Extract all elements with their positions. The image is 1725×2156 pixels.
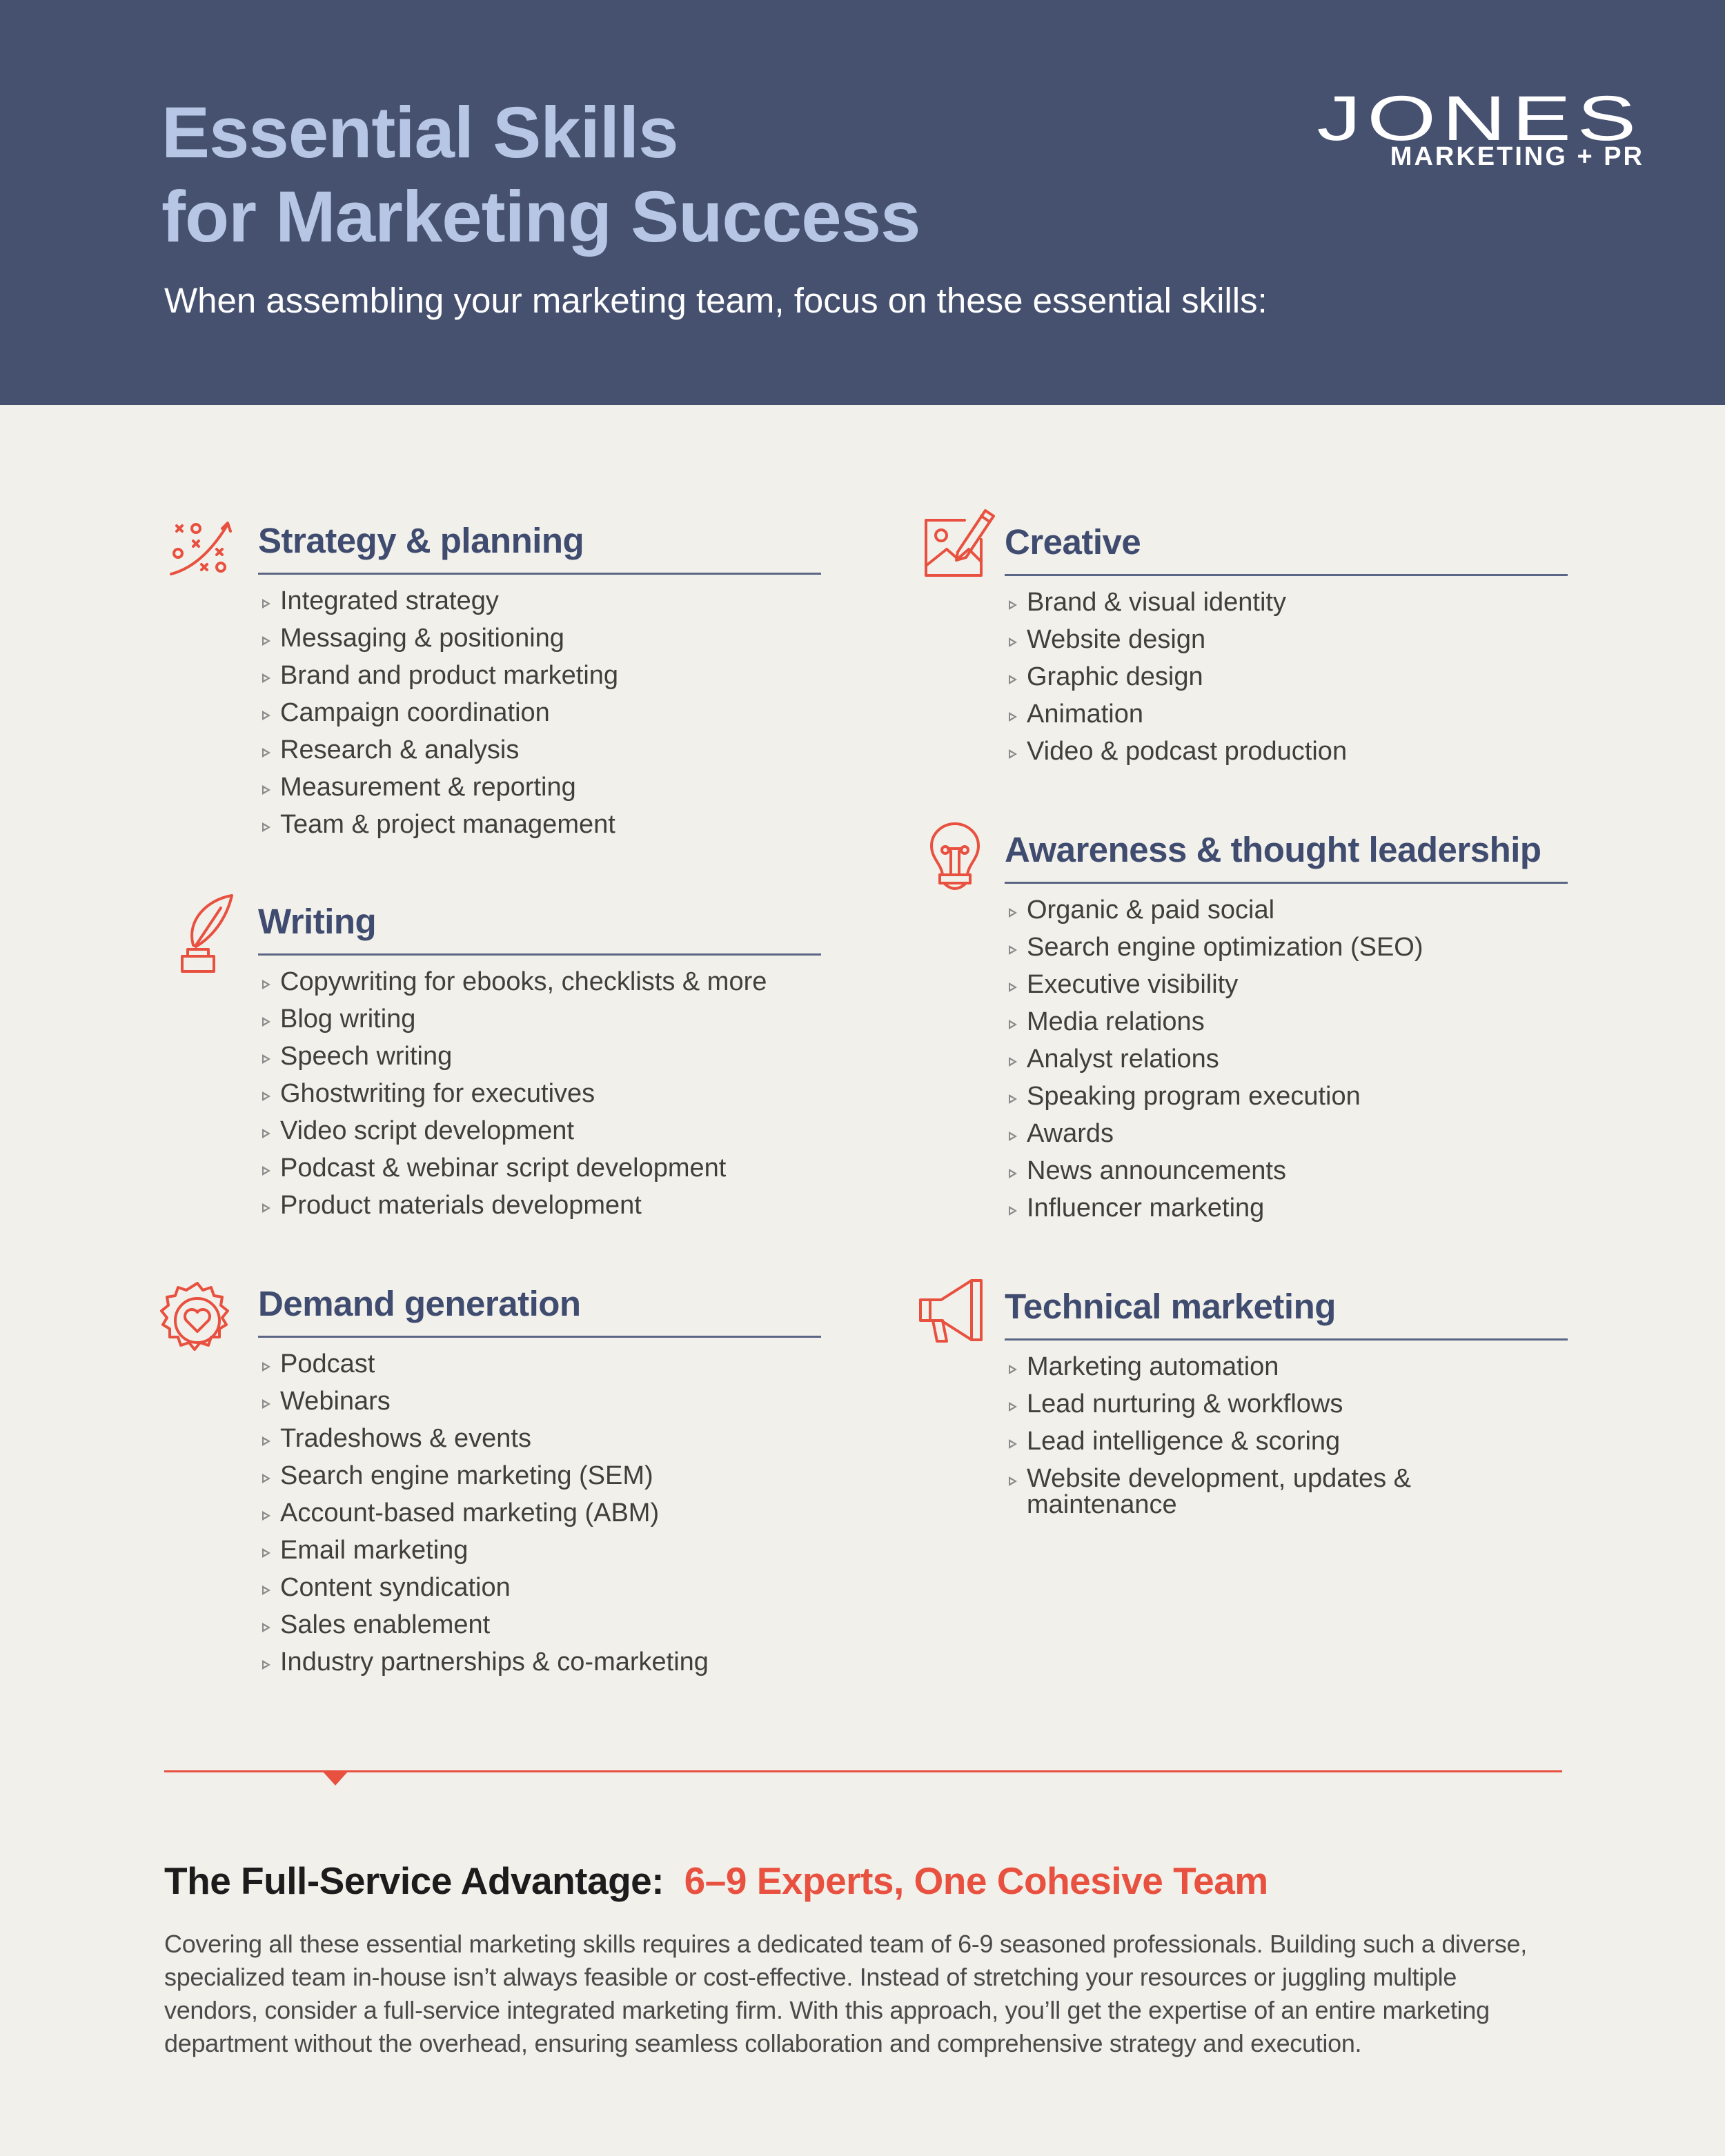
- panel: strategy & planning: [258, 521, 821, 839]
- panel: demand generation: Account-based marketing (ABM): [280, 1499, 659, 1527]
- panel: strategy & planning: Measurement & reporting: [280, 773, 576, 802]
- panel: writing: [258, 902, 821, 1220]
- panel: awareness & thought leadership: [1005, 830, 1568, 1223]
- panel: demand generation: [258, 1284, 821, 1677]
- panel: technical marketing: Marketing automation: [1027, 1352, 1279, 1381]
- panel: demand generation: Industry partnerships & co-marketing: [280, 1648, 709, 1677]
- panel: writing: Product materials development: [280, 1191, 642, 1220]
- panel: technical marketing: Technical marketing: [1005, 1287, 1336, 1326]
- icon: lightbulb: [930, 822, 980, 890]
- panel: awareness & thought leadership: Executive visibility: [1027, 970, 1238, 999]
- panel: strategy & planning: Campaign coordination: [280, 698, 550, 727]
- icon: quill and ink: [181, 894, 233, 973]
- icon: image pencil: [925, 509, 995, 577]
- panel: demand generation: Webinars: [280, 1387, 391, 1416]
- panel: demand generation: Email marketing: [280, 1536, 468, 1565]
- title: Essential Skills: [161, 92, 678, 173]
- panel: technical marketing: maintenance: [1027, 1490, 1177, 1519]
- panel: technical marketing: Lead intelligence & scoring: [1027, 1427, 1340, 1456]
- panel: awareness & thought leadership: Media relations: [1027, 1007, 1205, 1036]
- panel: writing: Speech writing: [280, 1042, 452, 1071]
- subtitle: When assembling your marketing team, focus on these essential skills:: [164, 281, 1268, 320]
- header band: [0, 0, 1725, 405]
- panel: demand generation: Search engine marketing (SEM): [280, 1461, 653, 1490]
- panel: demand generation: Podcast: [280, 1349, 375, 1378]
- panel: demand generation: Tradeshows & events: [280, 1424, 531, 1453]
- panel: awareness & thought leadership: News announcements: [1027, 1156, 1286, 1185]
- paragraph: specialized team in-house isn’t always feasible or cost-effective. Instead of stretching your resources or juggling multiple: [164, 1963, 1457, 1991]
- title: for Marketing Success: [161, 177, 920, 257]
- panel: awareness & thought leadership: Influencer marketing: [1027, 1194, 1264, 1223]
- panel: awareness & thought leadership: Search engine optimization (SEO): [1027, 933, 1423, 962]
- paragraph: vendors, consider a full-service integrated marketing firm. With this approach, you’ll get the expertise of an entire marketing: [164, 1996, 1490, 2024]
- panel: strategy & planning: Brand and product marketing: [280, 661, 618, 690]
- panel: awareness & thought leadership: Analyst relations: [1027, 1045, 1219, 1074]
- panel: creative: [1005, 522, 1568, 766]
- panel: writing: Blog writing: [280, 1005, 415, 1034]
- panel: demand generation: Demand generation: [258, 1284, 581, 1323]
- panel: writing: Video script development: [280, 1116, 574, 1145]
- panel: demand generation: Content syndication: [280, 1573, 511, 1602]
- title: [161, 92, 920, 257]
- panel: technical marketing: Website development, updates &: [1027, 1464, 1411, 1493]
- panel: technical marketing: [1005, 1287, 1568, 1519]
- icon: megaphone: [919, 1279, 983, 1343]
- divider with pointer: [164, 1770, 1562, 1786]
- panel: writing: Copywriting for ebooks, checklists & more: [280, 967, 767, 996]
- panel: creative: Creative: [1005, 522, 1141, 562]
- panel: strategy & planning: Research & analysis: [280, 735, 519, 764]
- paragraph: department without the overhead, ensuring seamless collaboration and comprehensive strategy and execution.: [164, 2029, 1361, 2057]
- panel: writing: Podcast & webinar script development: [280, 1154, 726, 1183]
- icon: strategy play: [170, 522, 232, 575]
- heading: full-service advantage: The Full-Service Advantage: 6–9 Experts, One Cohesive Team: [164, 1859, 1268, 1902]
- panel: creative: Website design: [1027, 625, 1205, 654]
- paragraph: Covering all these essential marketing skills requires a dedicated team of 6-9 seasoned professionals. Building such a diverse,: [164, 1930, 1527, 1958]
- panel: awareness & thought leadership: Awareness & thought leadership: [1005, 830, 1541, 869]
- panel: demand generation: Sales enablement: [280, 1610, 490, 1639]
- panel: technical marketing: Lead nurturing & workflows: [1027, 1389, 1343, 1418]
- panel: strategy & planning: Team & project management: [280, 810, 615, 839]
- icon: gear heart: [160, 1282, 229, 1351]
- panel: creative: Graphic design: [1027, 662, 1203, 691]
- panel: creative: Animation: [1027, 700, 1143, 729]
- paragraph: [164, 1930, 1527, 2057]
- panel: creative: Brand & visual identity: [1027, 588, 1286, 617]
- panel: awareness & thought leadership: Organic & paid social: [1027, 896, 1274, 924]
- panel: awareness & thought leadership: Speaking program execution: [1027, 1082, 1361, 1111]
- logo: JONES: [1317, 83, 1642, 154]
- panel: creative: Video & podcast production: [1027, 737, 1347, 766]
- panel: writing: Ghostwriting for executives: [280, 1079, 595, 1108]
- logo: MARKETING + PR: [1390, 142, 1644, 171]
- panel: strategy & planning: Integrated strategy: [280, 586, 499, 615]
- panel: awareness & thought leadership: Awards: [1027, 1119, 1114, 1148]
- panel: strategy & planning: Messaging & positioning: [280, 624, 564, 653]
- panel: writing: Writing: [258, 902, 376, 941]
- panel: strategy & planning: Strategy & planning: [258, 521, 584, 560]
